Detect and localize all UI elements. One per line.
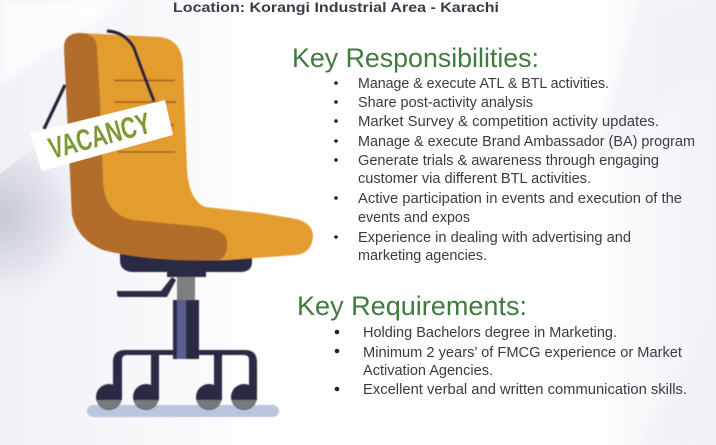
list: responsibilities <box>334 76 695 264</box>
chair cylinder <box>173 300 199 359</box>
list: responsibilities: Generate trials & awareness through engaging <box>358 153 659 169</box>
chair seat base <box>120 250 252 277</box>
list: responsibilities: Active participation in events and execution of the <box>358 191 682 207</box>
list: requirements: Excellent verbal and written communication skills. <box>363 382 687 398</box>
list: responsibilities: Manage & execute Brand Ambassador (BA) program <box>358 134 695 150</box>
list: responsibilities: customer via different BTL activities. <box>358 171 591 187</box>
list: requirements: Holding Bachelors degree in Marketing. <box>363 325 617 341</box>
list: responsibilities: Market Survey & competition activity updates. <box>358 114 659 130</box>
chair back shading <box>64 33 227 260</box>
heading: key requirements: Key Requirements: <box>297 291 527 321</box>
list: requirements: Minimum 2 years’ of FMCG experience or Market <box>363 345 682 361</box>
list: requirements <box>335 325 687 398</box>
chair legs <box>113 350 257 400</box>
illustration: office chair <box>44 31 313 417</box>
vacancy sign: VACANCY <box>45 107 154 166</box>
chair floor shadow <box>87 405 279 417</box>
chair lever <box>117 277 176 297</box>
list: responsibilities: Share post-activity analysis <box>358 95 533 111</box>
vacancy sign <box>30 100 173 171</box>
chair wheels <box>96 384 257 410</box>
list: responsibilities: events and expos <box>358 210 470 226</box>
list: responsibilities: Manage & execute ATL & BTL activities. <box>358 76 609 92</box>
list: responsibilities: marketing agencies. <box>358 248 487 264</box>
list: responsibilities: Experience in dealing with advertising and <box>358 230 631 246</box>
chair piston <box>177 276 195 301</box>
list: requirements: Activation Agencies. <box>363 363 493 379</box>
chair body <box>64 33 313 260</box>
sign strap <box>44 31 154 129</box>
chair stitching lines <box>114 80 176 152</box>
heading: key responsibilities: Key Responsibilities: <box>292 43 539 73</box>
